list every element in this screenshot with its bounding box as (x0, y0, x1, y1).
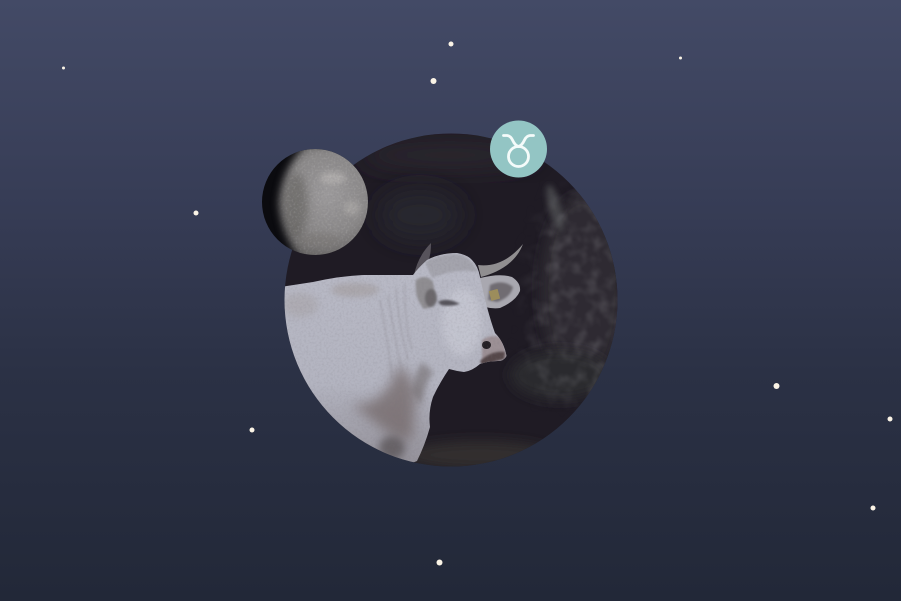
bull: shading and fur (280, 250, 510, 470)
icon: Taurus glyph (504, 136, 534, 166)
bull: ear (480, 275, 520, 308)
forest background texture (386, 144, 618, 466)
bull: neck wrinkles (380, 286, 412, 366)
planet: craters and mottling (320, 172, 346, 184)
bull: face highlight (444, 290, 480, 354)
bull: body and head (280, 253, 506, 470)
icon: Taurus zodiac badge (490, 120, 547, 178)
planet: lit surface (274, 149, 368, 255)
bull: left ear (416, 277, 436, 309)
planet: Mercury (262, 149, 368, 255)
bull: right horn (478, 244, 523, 277)
photo disc: bull in dark forest (280, 134, 625, 470)
bull: muzzle (482, 336, 507, 362)
bull (280, 243, 523, 470)
bull: fur grain (285, 256, 492, 403)
bull: eye (438, 300, 460, 306)
bull: back markings (331, 283, 379, 297)
bull: brown chest patch (350, 365, 416, 440)
bull: left horn (414, 243, 431, 275)
bull: head fur (425, 254, 478, 278)
